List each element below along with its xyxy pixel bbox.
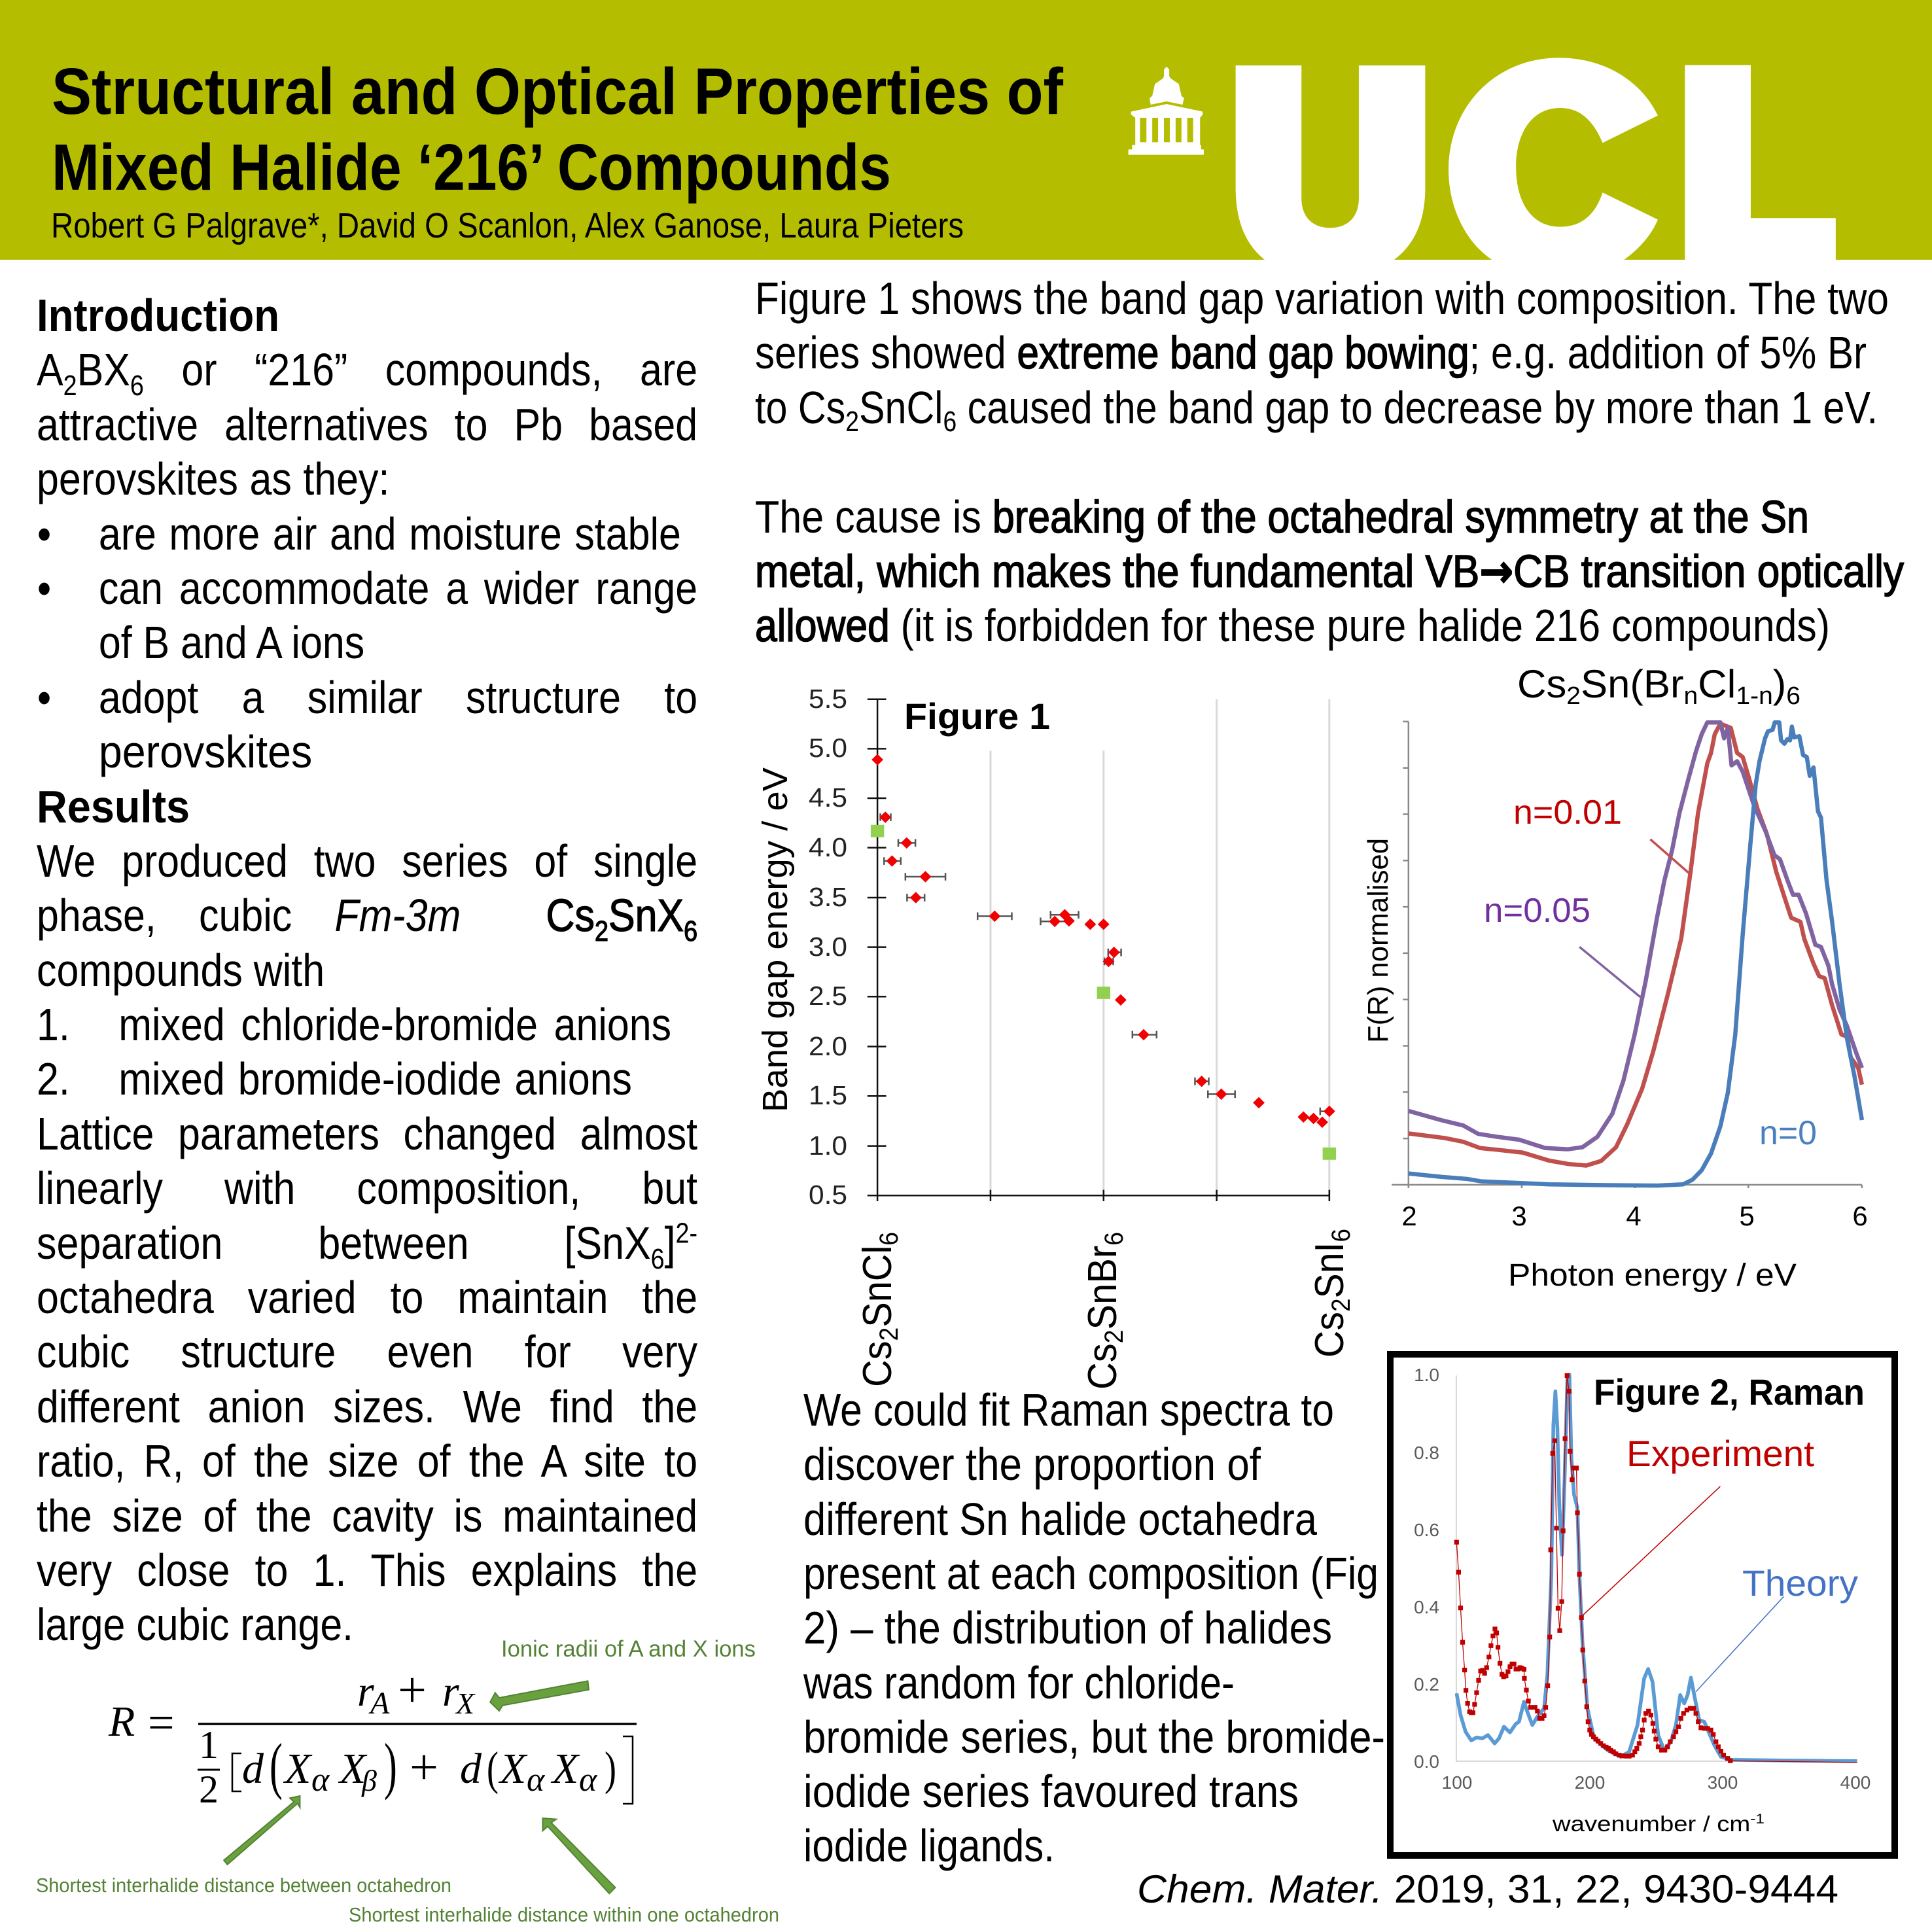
tick labels: 400 [1840,1772,1871,1793]
y tick labels: 5.0 [809,733,847,763]
panel: introduction and results text: cubic structure even for very [37,1326,697,1377]
panel: introduction and results text: Results [37,781,190,832]
text block: Raman description: We could fit Raman spectra to [803,1384,1334,1435]
text block: Raman description [803,1384,1385,1871]
tick labels: 0.0 [1414,1751,1439,1772]
citation: Chem. Mater. 2019, 31, 22, 9430-9444 [1137,1867,1838,1911]
panel: introduction and results text: phase, cubic Fm-3m Cs2SnX6 [37,890,697,947]
equation for R: X [455,1687,476,1720]
panel: introduction and results text: ratio, R, of the size of the A site to [37,1435,697,1486]
chart title: n [1683,682,1698,710]
gridlines and axes [868,699,1329,1201]
chart title: 6 [1786,682,1800,710]
text block: Raman description: discover the proportion of [803,1439,1261,1490]
x labels: SnBr [1080,1246,1125,1329]
curves [1409,722,1862,1186]
text block: band gap description: metal, which makes the fundamental VB→CB transition optically [755,544,1904,598]
equation for R: ) [384,1732,397,1801]
chart: reflectance spectra: n=0.05 [1484,892,1590,930]
text block: band gap description: to Cs [755,382,862,433]
panel: introduction and results text: mixed chloride-bromide anions [118,999,671,1050]
panel: introduction and results text: linearly with composition, but [37,1163,697,1214]
x axis title: Photon energy / eV [1508,1258,1797,1293]
chart: reflectance spectra [1362,662,1868,1293]
text block: Raman description: was random for chloride- [803,1657,1235,1708]
panel: introduction and results text: attractive alternatives to Pb based [37,399,697,450]
panel: introduction and results text: A2BX6 or “216” compounds, are [37,344,697,402]
equation for R: = [148,1696,175,1749]
y tick labels: 2.5 [809,981,847,1011]
panel: introduction and results text: large cubic range. [37,1599,353,1650]
x tick labels: 4 [1626,1201,1642,1231]
text block: band gap description: 6 [943,406,957,438]
x tick labels: 3 [1511,1201,1527,1231]
tick labels: 200 [1575,1772,1605,1793]
title: Mixed Halide ‘216’ Compounds [52,131,891,204]
panel: introduction and results text: octahedra varied to maintain the [37,1272,697,1323]
panel: introduction and results text: 2. [37,1053,70,1104]
tick labels: 0.8 [1414,1443,1439,1463]
x axis title: -1 [1750,1812,1765,1827]
text block: Raman description: iodide ligands. [803,1820,1055,1871]
equation for R: α [527,1761,546,1799]
equation for R: r [357,1668,374,1715]
equation for R: 2 [199,1768,219,1811]
tick labels: 300 [1708,1772,1738,1793]
annotation: within octahedron: Shortest interhalide distance within one octahedron [349,1903,779,1926]
x labels: 6 [875,1232,904,1246]
y axis title: F(R) normalised [1362,838,1394,1043]
panel: introduction and results text: • [37,563,51,614]
tick labels: 1.0 [1414,1365,1439,1385]
x tick labels: 5 [1739,1201,1755,1231]
panel: introduction and results text: We produced two series of single [37,835,697,887]
panel: introduction and results text: of B and A ions [99,617,364,668]
x labels [855,1229,1356,1390]
tick labels: 0.2 [1414,1674,1439,1695]
panel: introduction and results text: very close to 1. This explains the [37,1545,697,1596]
figure label: Figure 2, Raman [1594,1371,1865,1413]
equation for R: ( [487,1742,499,1795]
equation for R: + [410,1738,438,1795]
panel: introduction and results text: perovskites as they: [37,453,389,504]
panel: introduction and results text: adopt a similar structure to [99,672,697,723]
tick labels: 100 [1442,1772,1472,1793]
panel: introduction and results text: Lattice parameters changed almost [37,1108,697,1159]
frame [1390,1354,1895,1855]
series labels: n=0.01 [1513,794,1622,832]
figure label: Figure 1 [904,695,1050,737]
chart: Figure 2 Raman [1390,1354,1895,1855]
y tick labels: 5.5 [809,684,847,714]
chart title: Sn(Br [1581,662,1683,706]
panel: introduction and results text: perovskites [99,726,312,777]
green arrows [224,1681,615,1893]
panel: introduction and results text: 1. [37,999,70,1050]
panel: introduction and results text: Introduction [37,290,279,341]
equation for R: + [398,1661,427,1718]
y tick labels: 2.0 [809,1031,847,1061]
x labels: Cs [1080,1340,1125,1390]
tick labels [1414,1365,1871,1793]
x labels: Cs [855,1337,900,1387]
series label: experiment: Experiment [1626,1433,1814,1474]
equation for R: X [550,1745,580,1793]
text block: band gap description: series showed extreme band gap bowing; e.g. addition of 5% Br [755,327,1867,378]
logo: UCL letters [1236,58,1836,260]
chart: Figure 1 band gap vs composition [756,684,1356,1390]
panel: introduction and results text: • [37,672,51,723]
tick labels: 0.4 [1414,1597,1439,1617]
x labels: SnCl [855,1246,900,1327]
y tick labels: 3.0 [809,932,847,962]
panel: introduction and results text: • [37,508,51,559]
annotation: between octahedron: Shortest interhalide distance between octahedron [36,1874,451,1897]
chart title: Cl [1698,662,1736,706]
panel: introduction and results text: the size of the cavity is maintained [37,1490,697,1541]
authors: Robert G Palgrave*, David O Scanlon, Alex Ganose, Laura Pieters [51,206,964,245]
text block: Raman description: different Sn halide octahedra [803,1494,1317,1545]
title [52,55,1064,204]
panel: introduction and results text: can accommodate a wider range [99,563,697,614]
y axis title: Band gap energy / eV [756,767,795,1112]
panel: introduction and results text: different anion sizes. We find the [37,1381,697,1432]
text block: band gap description: The cause is breaking of the octahedral symmetry at the Sn [755,491,1809,542]
text block: Raman description: 2) – the distribution of halides [803,1602,1332,1653]
icon: UCL portico building [1129,67,1204,155]
equation for R: X [283,1745,313,1793]
equation for R: β [361,1764,377,1797]
text block: band gap description: SnCl [859,382,943,433]
equation for R: R [108,1698,135,1746]
axes [1392,722,1862,1188]
chart: reflectance spectra: n=0 [1759,1114,1817,1152]
text block: Raman description: iodide series favoured trans [803,1766,1299,1817]
series label: theory: Theory [1742,1562,1858,1604]
x tick labels: 2 [1401,1201,1417,1231]
y tick labels: 1.0 [809,1131,847,1161]
equation for R: X [338,1745,368,1793]
y tick labels: 1.5 [809,1080,847,1110]
panel: introduction and results text: mixed bromide-iodide anions [118,1053,632,1104]
error bars and data points [871,754,1336,1160]
equation for R: A [368,1686,390,1721]
x labels: 2 [1327,1298,1356,1312]
text block: Raman description: bromide series, but the bromide- [803,1712,1385,1763]
x labels: Cs [1307,1308,1352,1358]
panel: introduction and results text [37,290,697,1650]
y tick labels: 4.0 [809,832,847,862]
equation for R: α [579,1761,598,1799]
equation for R: d [460,1745,482,1793]
equation for R: α [311,1761,330,1799]
title: Structural and Optical Properties of [52,55,1064,128]
plot [1456,1375,1857,1763]
equation for R [108,1661,637,1811]
chart title: 2 [1566,682,1581,710]
panel: introduction and results text: are more air and moisture stable [99,508,681,559]
equation for R: r [442,1668,459,1715]
x labels: 6 [1100,1232,1129,1246]
x labels: 6 [1327,1229,1356,1242]
equation for R: d [242,1745,264,1793]
text block: band gap description [755,273,1904,651]
x labels: SnI [1307,1242,1352,1298]
tick labels: 0.6 [1414,1520,1439,1540]
x tick labels: 6 [1852,1201,1868,1231]
y tick labels: 0.5 [809,1180,847,1210]
text block: Raman description: present at each composition (Fig [803,1548,1379,1599]
y tick labels: 4.5 [809,782,847,813]
y tick labels: 3.5 [809,882,847,912]
x labels: 2 [875,1327,904,1341]
annotation: ionic radii: Ionic radii of A and X ions [501,1636,756,1662]
text block: band gap description: 2 [845,406,859,438]
panel: introduction and results text: separation between [SnX6]2- [37,1218,697,1275]
equation for R: ( [270,1732,283,1801]
x tick labels [1401,1201,1868,1231]
equation for R: X [498,1745,528,1793]
x axis title: wavenumber / cm [1553,1812,1723,1836]
chart title: Cs [1517,662,1565,706]
chart title: 1-n [1736,682,1773,710]
panel: introduction and results text: compounds with [37,945,325,996]
header banner [0,0,1932,260]
chart title: ) [1773,662,1786,706]
y tick labels [809,684,847,1210]
equation for R: ) [605,1742,616,1795]
x labels: 2 [1100,1329,1129,1343]
equation for R: 1 [199,1723,219,1766]
